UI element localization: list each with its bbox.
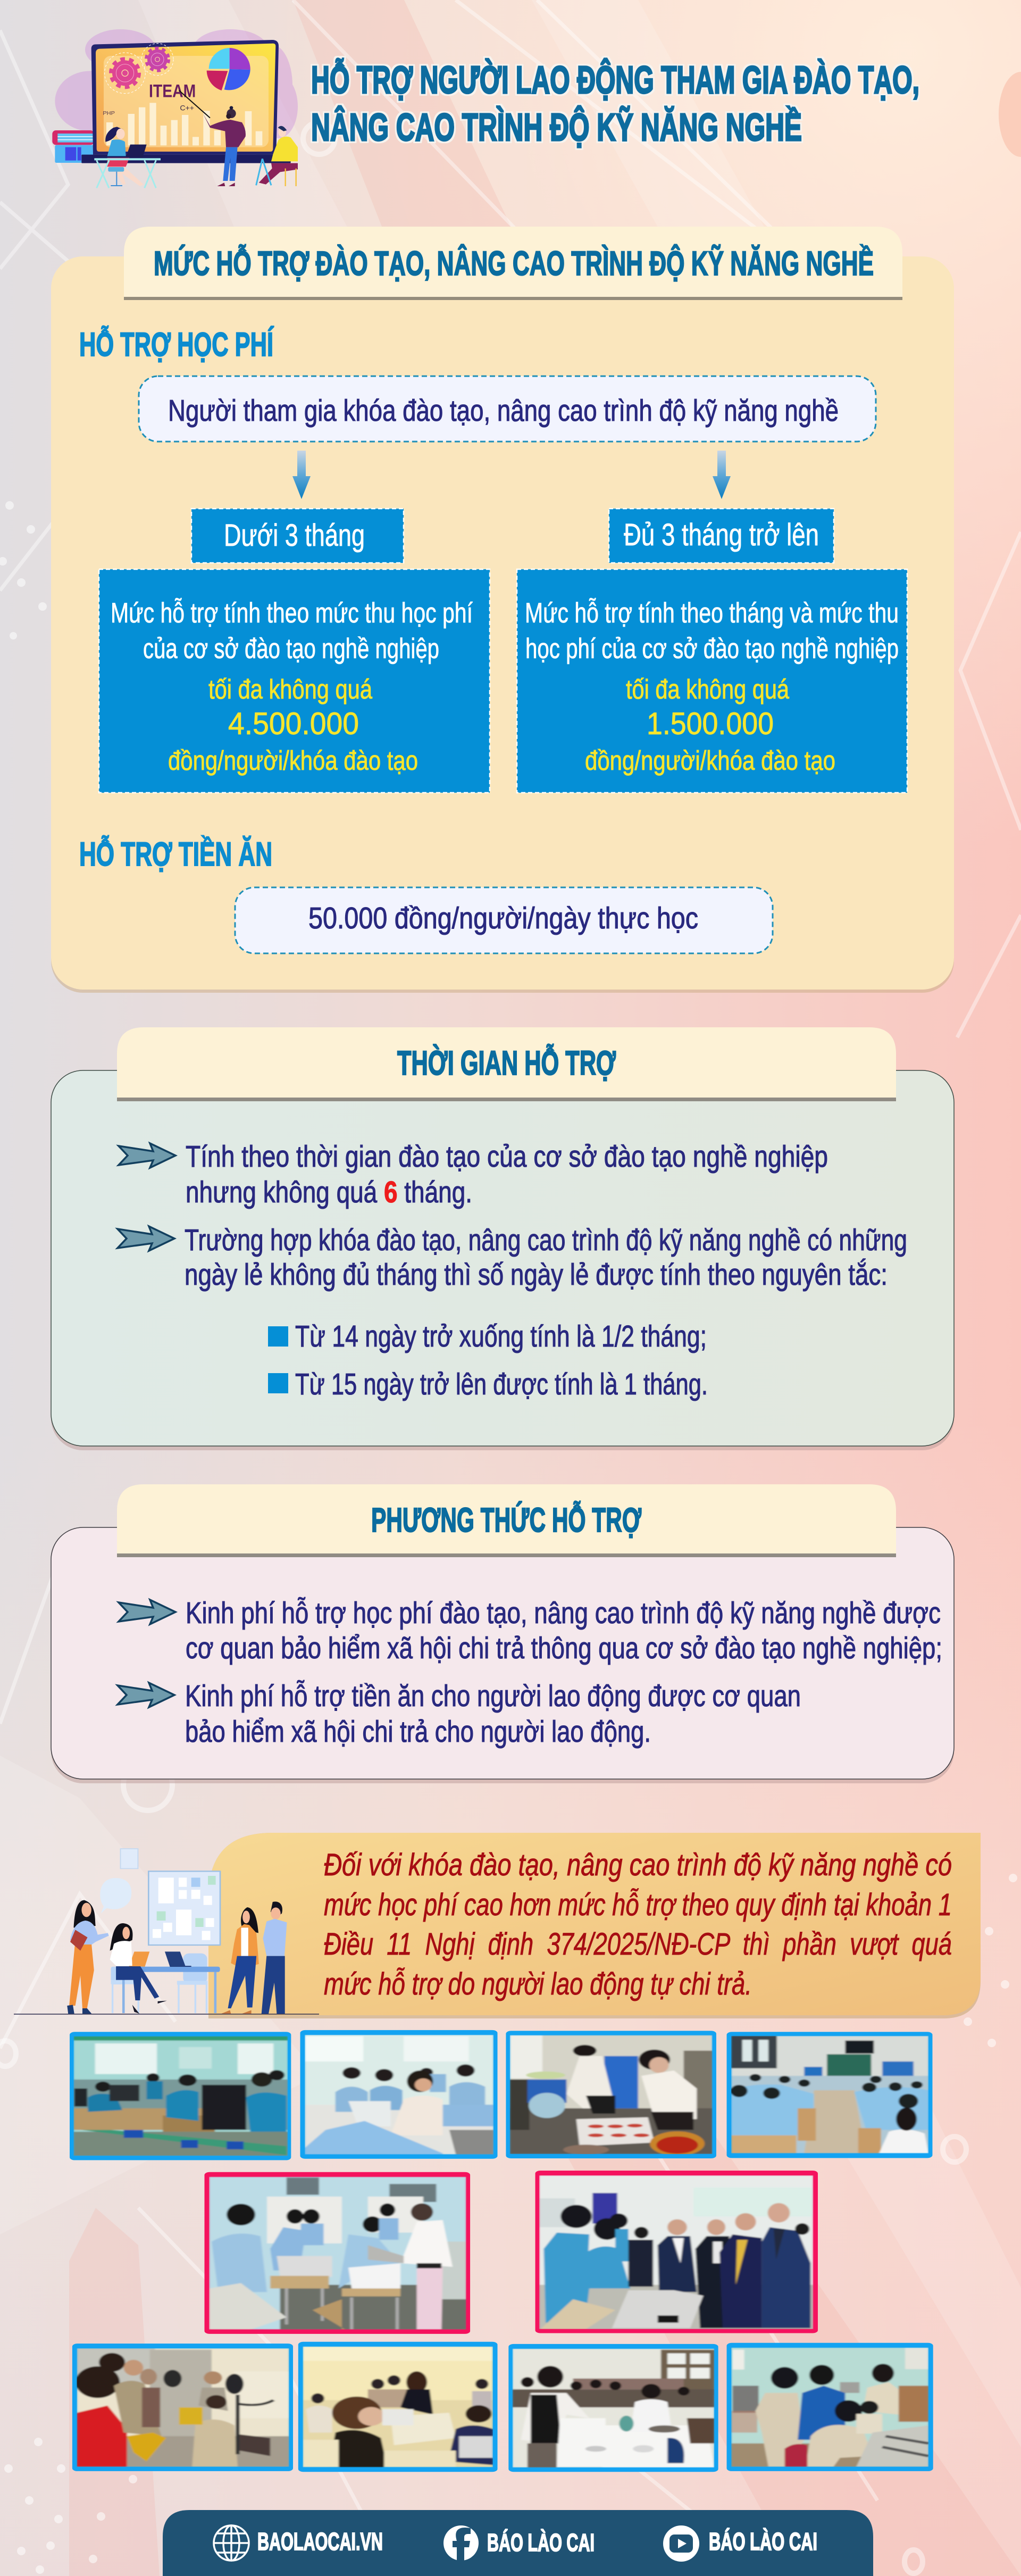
- text block: meal payment: Kinh phí hỗ trợ tiền ăn cho người lao động được cơ quan: [185, 1679, 801, 1713]
- rule: 15 days: Từ 15 ngày trở lên được tính là 1 tháng.: [295, 1367, 708, 1401]
- card: 3 months or more: đồng/người/khóa đào tạo: [585, 745, 835, 776]
- card: under 3 months: đồng/người/khóa đào tạo: [168, 745, 418, 776]
- label: dưới 3 tháng: Dưới 3 tháng: [224, 518, 365, 553]
- box: người tham gia: [139, 376, 876, 442]
- title: NÂNG CAO TRÌNH ĐỘ KỸ NĂNG NGHỀ: [311, 106, 802, 149]
- card: under 3 months: 4.500.000: [228, 707, 359, 741]
- bullet square: [268, 1373, 288, 1393]
- icon: facebook: [443, 2525, 479, 2561]
- photo: delegation visit: [535, 2171, 818, 2333]
- text block: meal payment: bảo hiểm xã hội chi trả cho người lao động.: [185, 1715, 651, 1749]
- icon: arrow bullet: [119, 1143, 175, 1168]
- callout: note on excess fee: mức hỗ trợ do người lao động tự chi trả.: [324, 1967, 752, 2001]
- photo: classroom: [727, 2032, 932, 2158]
- text block: tuition payment: [186, 1596, 942, 1665]
- panel: phương thức hỗ trợ: [51, 1484, 954, 1783]
- icon: globe: [214, 2525, 249, 2561]
- card: under 3 months: [99, 569, 490, 793]
- photo: sewing class: [300, 2030, 498, 2159]
- card: 3 months or more: tối đa không quá: [626, 674, 790, 704]
- card: under 3 months: Mức hỗ trợ tính theo mức thu học phí: [111, 597, 473, 629]
- icon: arrow bullet: [118, 1683, 174, 1707]
- photo gallery: [70, 2030, 933, 2472]
- label: facebook: BÁO LÀO CAI: [487, 2529, 595, 2556]
- panel header tab: [124, 227, 902, 300]
- panel header tab: [117, 1027, 896, 1101]
- callout: note on excess fee: [208, 1833, 981, 2018]
- card: under 3 months: tối đa không quá: [208, 674, 373, 704]
- panel: mức hỗ trợ: [51, 227, 954, 993]
- footer bar: [163, 2510, 873, 2576]
- panel header tab: THỜI GIAN HỖ TRỢ: [397, 1043, 616, 1082]
- panel: thời gian hỗ trợ: [51, 1027, 954, 1450]
- card: under 3 months: của cơ sở đào tạo nghề nghiệp: [143, 633, 439, 664]
- icon: youtube: [663, 2525, 699, 2562]
- text block: 6 months: nhưng không quá 6 tháng.: [186, 1175, 472, 1209]
- bullet square: [268, 1326, 288, 1347]
- box: tiền ăn: [235, 887, 773, 953]
- photo: kitchen class: [506, 2031, 716, 2158]
- box: tiền ăn: 50.000 đồng/người/ngày thực học: [308, 901, 698, 935]
- title: [311, 58, 919, 149]
- header illustration: presentation on laptop: C++: [180, 103, 194, 112]
- photo: refrigeration class: [727, 2343, 933, 2471]
- panel header tab: PHƯƠNG THỨC HỖ TRỢ: [371, 1500, 641, 1539]
- photo: welding: [72, 2344, 293, 2471]
- photo: computer lab: [70, 2032, 291, 2160]
- card: 3 months or more: [517, 569, 907, 793]
- photo: electrical workshop: [204, 2172, 470, 2334]
- header illustration: presentation on laptop: [52, 29, 298, 188]
- illustration: team meeting: [14, 1848, 319, 2015]
- card: 3 months or more: học phí của cơ sở đào tạo nghề nghiệp: [525, 633, 899, 664]
- heading: hỗ trợ học phí: HỖ TRỢ HỌC PHÍ: [79, 326, 274, 363]
- label: website: BAOLAOCAI.VN: [257, 2528, 383, 2555]
- box: người tham gia: Người tham gia khóa đào tạo, nâng cao trình độ kỹ năng nghề: [168, 394, 839, 428]
- header illustration: presentation on laptop: ITEAM: [149, 81, 196, 102]
- arrow right: [713, 451, 731, 499]
- heading: hỗ trợ tiền ăn: HỖ TRỢ TIỀN ĂN: [79, 835, 272, 873]
- card: 3 months or more: 1.500.000: [647, 707, 774, 741]
- icon: arrow bullet: [118, 1226, 174, 1251]
- card: 3 months or more: Mức hỗ trợ tính theo tháng và mức thu: [525, 597, 899, 629]
- text block: meal payment: [185, 1679, 801, 1749]
- icon: arrow bullet: [119, 1600, 175, 1624]
- photo: table service: [508, 2344, 718, 2472]
- text block: 6 months: Tính theo thời gian đào tạo của cơ sở đào tạo nghề nghiệp: [186, 1140, 828, 1174]
- label: đủ 3 tháng trở lên: [609, 509, 834, 563]
- label: đủ 3 tháng trở lên: Đủ 3 tháng trở lên: [624, 518, 819, 552]
- rule: 14 days: Từ 14 ngày trở xuống tính là 1/2 tháng;: [295, 1319, 707, 1353]
- header illustration: presentation on laptop: PHP: [103, 111, 115, 117]
- panel header tab: [117, 1484, 896, 1557]
- photo: garment workshop: [298, 2342, 498, 2472]
- label: youtube: BÁO LÀO CAI: [709, 2528, 817, 2555]
- label: dưới 3 tháng: [191, 509, 404, 563]
- text block: odd days: [185, 1223, 907, 1292]
- arrow left: [292, 451, 311, 499]
- text block: 6 months: [186, 1140, 828, 1209]
